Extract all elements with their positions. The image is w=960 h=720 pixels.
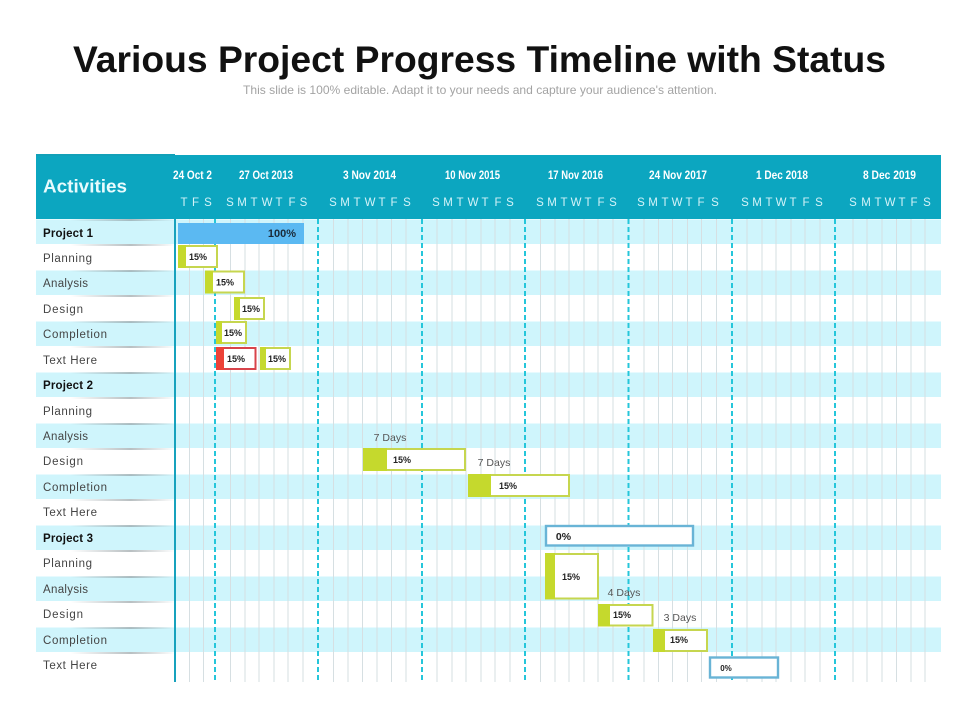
chart grid: day lines	[190, 219, 925, 682]
activity labels: Design	[43, 609, 83, 621]
activity labels: Project 3	[43, 533, 93, 545]
weekday letters: W	[571, 197, 582, 209]
bar: project 2 design 15%	[363, 448, 465, 471]
panel: alternating row bands	[36, 220, 941, 652]
date labels: 3 Nov 2014	[343, 168, 396, 182]
weekday letters: T	[250, 197, 258, 209]
label: 7 days: 7 Days	[374, 432, 406, 444]
bar: project 3 planning 15%: 15%	[562, 572, 580, 582]
weekday letters: T	[874, 197, 882, 209]
date labels: 1 Dec 2018	[756, 168, 808, 182]
bar: text here red 15%	[216, 347, 256, 370]
activity labels: Analysis	[43, 278, 88, 290]
weekday letters: T	[560, 197, 568, 209]
activity labels: Completion	[43, 635, 107, 647]
title: Various Project Progress Timeline with Status	[73, 39, 886, 80]
weekday letters: T	[661, 197, 669, 209]
activity labels	[43, 228, 107, 672]
weekday letters: F	[494, 197, 502, 209]
weekday letters: S	[300, 197, 308, 209]
weekday letters: M	[443, 197, 453, 209]
bar: analysis 15%	[205, 270, 244, 294]
weekday letters: S	[637, 197, 645, 209]
activity labels: Analysis	[43, 584, 88, 596]
bar: project 2 completion 15%: 15%	[499, 481, 517, 491]
weekday letters: W	[885, 197, 896, 209]
date labels: 24 Nov 2017	[649, 168, 707, 182]
bar: text here red 15%: 15%	[227, 354, 245, 364]
bar: project 3 design 15%	[598, 604, 652, 626]
bar: project 1 summary 100%	[178, 223, 304, 244]
activity labels: Completion	[43, 329, 107, 341]
bar: completion 15%	[216, 321, 246, 344]
weekday letters: W	[672, 197, 683, 209]
label: 7 days: 7 Days	[478, 457, 510, 469]
bar: project 3 text here 0%	[710, 658, 778, 678]
heading: activities: Activities	[43, 176, 127, 196]
weekday letters: T	[584, 197, 592, 209]
chart grid: dashed week markers	[215, 219, 835, 682]
activity labels: Planning	[43, 253, 92, 265]
weekday letters: F	[390, 197, 398, 209]
row separators shading	[36, 219, 175, 654]
activity labels: Project 2	[43, 380, 93, 392]
weekday letters: S	[403, 197, 411, 209]
weekday letters: S	[536, 197, 544, 209]
weekday letters: T	[275, 197, 283, 209]
weekday letters: S	[741, 197, 749, 209]
weekday letters: F	[910, 197, 918, 209]
weekday letters: T	[353, 197, 361, 209]
bar: design 15%: 15%	[242, 304, 260, 314]
weekday letters: M	[340, 197, 350, 209]
weekday letters: M	[752, 197, 762, 209]
weekday letters: F	[697, 197, 705, 209]
activity labels: Text Here	[43, 507, 97, 519]
bar: project 3 design 15%: 15%	[613, 610, 631, 620]
weekday letters: S	[815, 197, 823, 209]
weekday letters: W	[468, 197, 479, 209]
date labels	[173, 168, 916, 182]
bar: project 3 summary 0%	[546, 526, 693, 546]
bar: project 2 design 15%: 15%	[393, 455, 411, 465]
weekday letters: W	[776, 197, 787, 209]
subtitle: This slide is 100% editable. Adapt it to your needs and capture your audience's attention.	[243, 83, 717, 97]
bar: project 3 completion 15%	[653, 629, 707, 652]
activity labels: Project 1	[43, 228, 94, 240]
weekday letters: S	[711, 197, 719, 209]
activity labels: Text Here	[43, 355, 97, 367]
bar: project 3 planning 15%	[545, 553, 598, 599]
weekday letters: T	[685, 197, 693, 209]
activities axis line	[174, 219, 176, 682]
activity labels: Planning	[43, 558, 92, 570]
panel: header band	[36, 154, 941, 219]
bar: planning 15%: 15%	[189, 252, 207, 262]
weekday letters: M	[861, 197, 871, 209]
weekday letters: T	[481, 197, 489, 209]
weekday letters: S	[506, 197, 514, 209]
activity labels: Completion	[43, 482, 107, 494]
weekday letters: S	[226, 197, 234, 209]
weekday letters: M	[547, 197, 557, 209]
weekday letters: M	[237, 197, 247, 209]
weekday letters: S	[204, 197, 212, 209]
bar: analysis 15%: 15%	[216, 278, 234, 288]
weekday letters: T	[789, 197, 797, 209]
weekday letters: T	[456, 197, 464, 209]
weekday letters: T	[180, 197, 188, 209]
activity labels: Planning	[43, 406, 92, 418]
date labels: 10 Nov 2015	[445, 168, 500, 182]
bar: text here green 15%: 15%	[268, 354, 286, 364]
bar: project 3 text here 0%: 0%	[720, 664, 732, 673]
date labels: 27 Oct 2013	[239, 168, 293, 182]
weekday letters: M	[648, 197, 658, 209]
activity labels: Design	[43, 456, 83, 468]
date labels: 17 Nov 2016	[548, 168, 603, 182]
weekday letters: F	[597, 197, 605, 209]
weekday letters: T	[898, 197, 906, 209]
weekday letters: S	[609, 197, 617, 209]
weekday letters: T	[765, 197, 773, 209]
bar: project 1 summary 100%: 100%	[268, 228, 296, 240]
date labels: 8 Dec 2019	[863, 168, 916, 182]
bar: planning 15%	[178, 245, 217, 268]
weekday letters: S	[923, 197, 931, 209]
bar: completion 15%: 15%	[224, 328, 242, 338]
weekday letters: F	[288, 197, 296, 209]
activity labels: Analysis	[43, 431, 88, 443]
weekday letters: F	[192, 197, 199, 209]
activity labels: Text Here	[43, 660, 97, 672]
bar: text here green 15%	[260, 347, 290, 370]
activity labels: Design	[43, 304, 83, 316]
date labels: 24 Oct 2	[173, 168, 212, 182]
weekday letters: S	[432, 197, 440, 209]
bar: project 2 completion 15%	[468, 474, 569, 497]
weekday letters: S	[329, 197, 337, 209]
weekday letters: W	[365, 197, 376, 209]
weekday letters	[180, 197, 931, 209]
bar: design 15%	[234, 297, 264, 320]
weekday letters: F	[802, 197, 810, 209]
weekday letters: W	[262, 197, 273, 209]
label: 4 days: 4 Days	[608, 587, 640, 599]
weekday letters: T	[378, 197, 386, 209]
bar: project 3 summary 0%: 0%	[556, 531, 572, 543]
label: 3 days: 3 Days	[664, 612, 696, 624]
bar: project 3 completion 15%: 15%	[670, 635, 688, 645]
weekday letters: S	[849, 197, 857, 209]
